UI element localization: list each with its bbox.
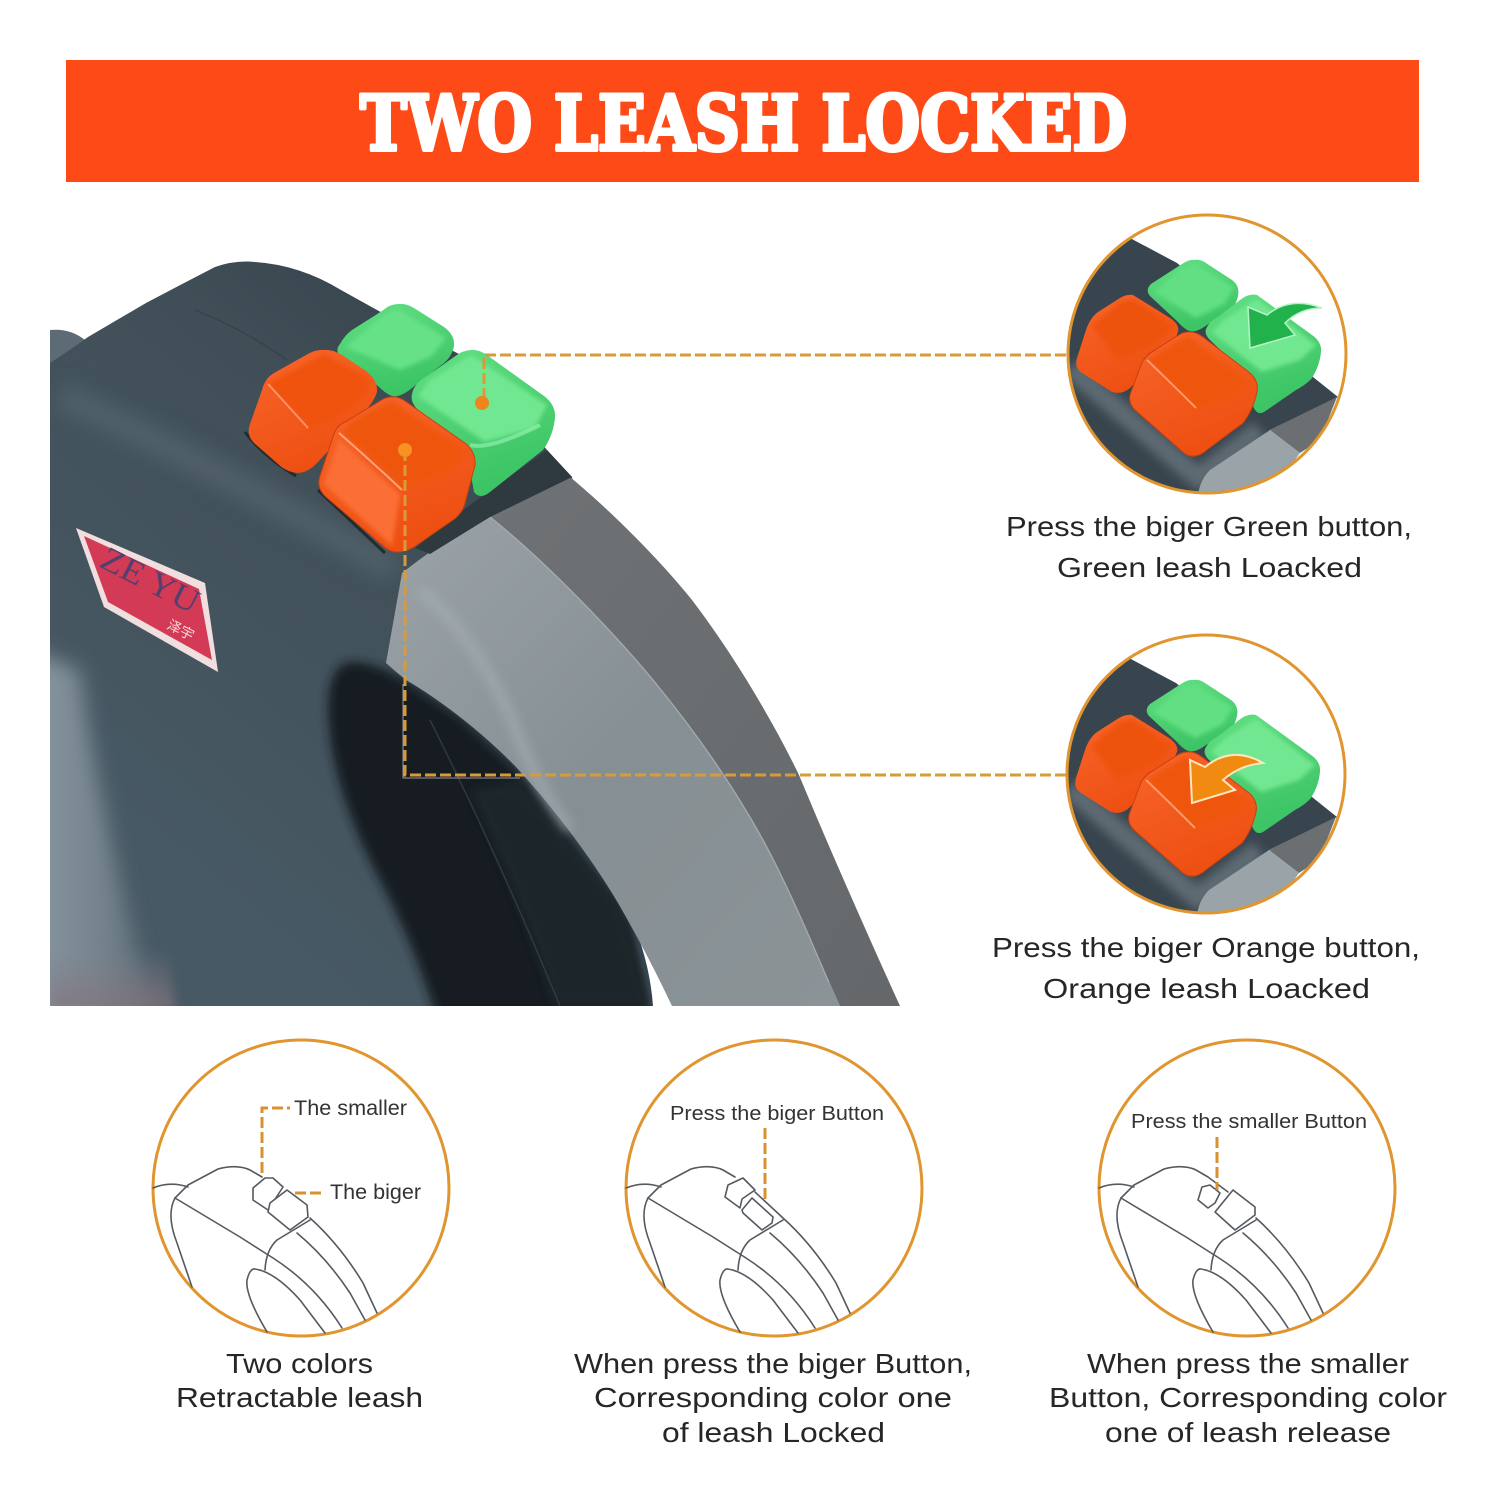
line drawing: leash handle — [153, 1167, 377, 1333]
icon: big orange button — [319, 397, 475, 552]
icon: small green button — [1148, 260, 1238, 331]
icon: big green button — [1205, 715, 1320, 833]
caption: two colors: Two colors — [226, 1348, 373, 1379]
connector: green button callout — [475, 355, 1066, 410]
callout: the smaller — [262, 1097, 407, 1173]
caption: green lock: Press the biger Green button, — [1006, 511, 1412, 542]
panel: diagram press smaller button — [1099, 1040, 1395, 1336]
line drawing: leash handle — [626, 1167, 850, 1333]
caption: two colors — [176, 1348, 423, 1413]
panel: diagram press bigger button — [626, 1040, 922, 1336]
caption: press bigger — [574, 1348, 972, 1448]
icon: small green button — [1147, 680, 1237, 751]
caption: two colors: Retractable leash — [176, 1382, 423, 1413]
icon: orange curved arrow — [1190, 755, 1263, 803]
caption: orange lock — [992, 932, 1420, 1004]
caption: press bigger: When press the biger Button, — [574, 1348, 972, 1379]
icon: green curved arrow — [1248, 303, 1322, 348]
icon: small orange button — [1076, 295, 1178, 393]
title banner — [66, 60, 1419, 182]
icon: small green button — [337, 304, 454, 396]
sticker: brand label: ZE YU — [94, 540, 206, 621]
line drawing: leash handle — [1099, 1167, 1323, 1333]
panel: diagram two colors — [153, 1040, 449, 1336]
caption: press smaller: When press the smaller — [1087, 1348, 1409, 1379]
sticker: brand label — [76, 528, 218, 672]
caption: orange lock: Press the biger Orange button, — [992, 932, 1420, 963]
icon: big orange button — [1130, 332, 1257, 456]
caption: press smaller — [1049, 1348, 1447, 1448]
sticker: brand label: 泽宇 — [165, 616, 197, 643]
callout: the biger: The biger — [330, 1181, 421, 1204]
title: TWO LEASH LOCKED — [360, 79, 1127, 168]
caption: press smaller: one of leash release — [1105, 1417, 1391, 1448]
icon: big green button — [1206, 295, 1321, 413]
caption: green lock: Green leash Loacked — [1057, 552, 1362, 583]
icon: big orange button — [1129, 752, 1256, 876]
connector: orange button callout — [398, 443, 1066, 778]
caption: press bigger: Corresponding color one — [594, 1382, 952, 1413]
icon: small orange button — [1075, 715, 1177, 813]
panel: green leash lock detail circle — [1060, 215, 1347, 495]
callout: press the smaller button: Press the smaller Button — [1131, 1111, 1367, 1133]
caption: press smaller: Button, Corresponding color — [1049, 1382, 1447, 1413]
panel: product photo of retractable leash — [30, 262, 900, 1030]
icon: big green button with callout dot — [412, 350, 555, 496]
caption: press bigger: of leash Locked — [662, 1417, 885, 1448]
icon: small orange button — [249, 350, 377, 473]
caption: orange lock: Orange leash Loacked — [1043, 973, 1370, 1004]
caption: green lock — [1006, 511, 1412, 583]
panel: orange leash lock detail circle — [1059, 635, 1346, 915]
callout: press the biger button: Press the biger Button — [670, 1103, 884, 1125]
callout: the smaller: The smaller — [294, 1097, 407, 1120]
